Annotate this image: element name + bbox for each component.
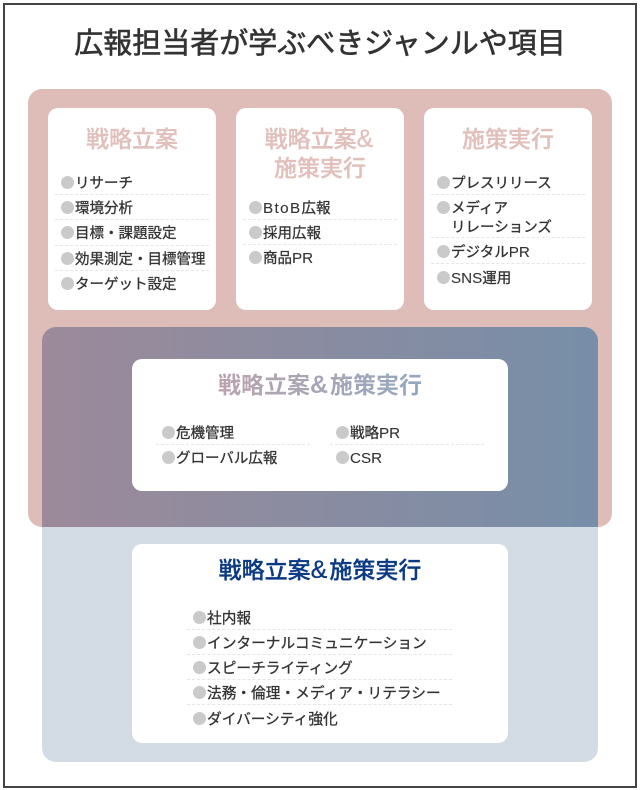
list: 法務・倫理・メディア・リテラシー [207, 686, 441, 702]
list: ダイバーシティ強化 [207, 712, 338, 728]
list: left column [156, 425, 310, 467]
list: SNS運用 [451, 270, 511, 287]
list: メディア [451, 200, 508, 216]
card: strategy planning [48, 108, 216, 310]
list: left column: 危機管理 [176, 426, 234, 442]
list: 効果測定・目標管理 [75, 252, 206, 268]
heading: 施策実行 [274, 155, 366, 181]
card: execution [424, 108, 592, 310]
heading: 戦略立案&施策実行 [218, 371, 422, 399]
card: center overlap [132, 359, 508, 491]
list: right column: CSR [350, 450, 382, 467]
list: 目標・課題設定 [75, 226, 176, 242]
panel: overlap band [42, 327, 598, 527]
list: デジタルPR [451, 244, 530, 261]
list: 環境分析 [75, 201, 133, 217]
card: planning and execution [236, 108, 404, 310]
list: インターナルコミュニケーション [207, 636, 427, 652]
list [243, 200, 397, 267]
list: left column: グローバル広報 [176, 451, 277, 467]
list: ターゲット設定 [75, 277, 176, 293]
list: right column [330, 425, 484, 467]
list: リサーチ [75, 176, 133, 192]
panel: upper pink group [28, 89, 612, 527]
list: 採用広報 [263, 226, 321, 242]
list: 商品PR [263, 250, 313, 267]
list: プレスリリース [451, 176, 552, 192]
list: 社内報 [207, 611, 251, 627]
heading: 施策実行 [462, 126, 554, 152]
card: bottom blue [132, 544, 508, 743]
panel: lower blue group [42, 327, 598, 762]
list: リレーションズ [451, 220, 552, 236]
list [187, 610, 452, 728]
title: 広報担当者が学ぶべきジャンルや項目 [74, 28, 566, 60]
heading: 戦略立案 [86, 126, 178, 152]
heading: 戦略立案&施策実行 [219, 556, 421, 584]
list [431, 175, 585, 287]
list: right column: 戦略PR [350, 425, 400, 442]
heading [265, 125, 375, 181]
list: スピーチライティング [207, 661, 353, 677]
list: BtoB広報 [263, 200, 331, 217]
list [55, 176, 209, 293]
heading: 戦略立案& [265, 125, 375, 153]
